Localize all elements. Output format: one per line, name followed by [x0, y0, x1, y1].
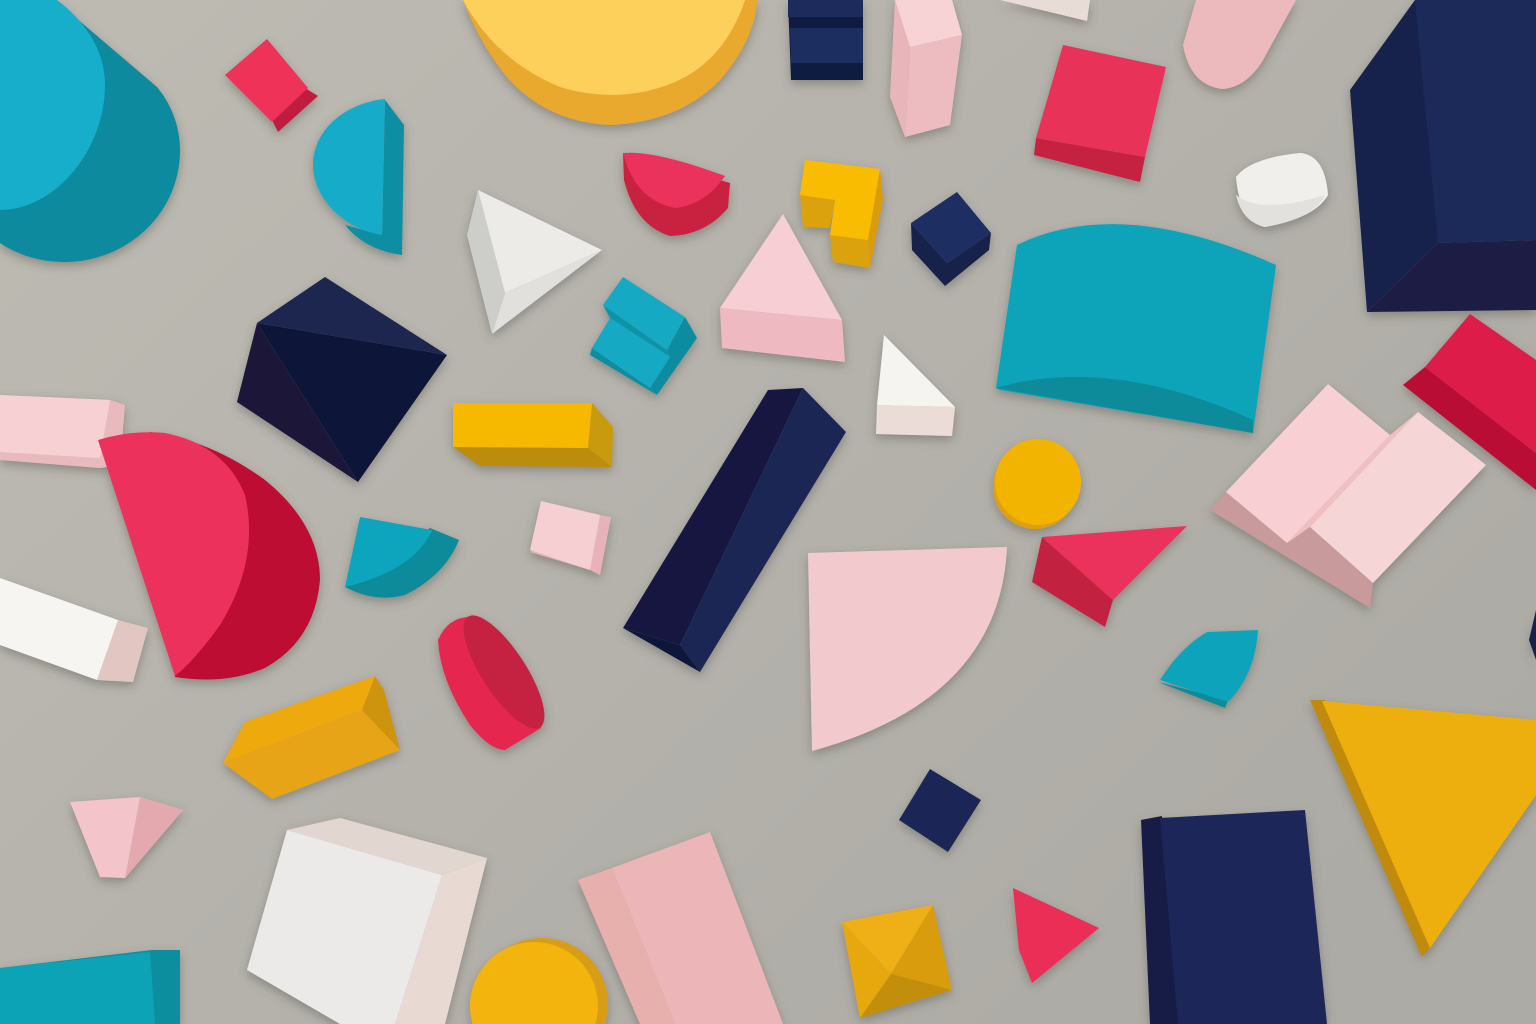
- pink large block: [578, 832, 783, 1024]
- red block right: [1403, 314, 1536, 490]
- pink small cube: [530, 501, 611, 575]
- pink triangle block: [720, 214, 845, 362]
- yellow triangle right: [1310, 700, 1536, 957]
- yellow bar: [453, 403, 613, 467]
- red disc on edge: [438, 605, 558, 750]
- red triangle block: [1032, 526, 1187, 627]
- white pill: [1236, 153, 1328, 227]
- yellow L block: [800, 160, 883, 268]
- navy sliver right edge: [1529, 610, 1536, 660]
- pink cylinder top right: [1183, 0, 1296, 89]
- teal half disc: [313, 99, 404, 255]
- navy large box top right: [1350, 0, 1536, 312]
- yellow prism: [223, 676, 400, 799]
- navy long bar: [623, 388, 846, 672]
- white pyramid: [467, 190, 602, 334]
- teal block bottom left: [0, 950, 180, 1024]
- white sliver top: [1000, 0, 1090, 21]
- red square block: [1034, 45, 1166, 182]
- pink bracket block: [1210, 384, 1486, 608]
- teal small quarter: [1158, 630, 1258, 708]
- pink small pyramid: [70, 797, 183, 878]
- red half cylinder: [98, 432, 320, 680]
- navy small cube: [911, 192, 991, 286]
- pink large quarter: [808, 547, 1007, 751]
- yellow square pyramid: [842, 905, 952, 1018]
- white small triangle: [876, 335, 955, 436]
- teal half cylinder: [996, 224, 1276, 433]
- red small pyramid: [1013, 888, 1099, 983]
- yellow disc: [993, 439, 1081, 529]
- red small block: [225, 39, 318, 132]
- white cube: [247, 818, 487, 1024]
- navy stepped block top: [788, 0, 863, 80]
- yellow disc bottom: [470, 938, 608, 1024]
- teal quarter block: [345, 517, 459, 598]
- white bar left: [0, 578, 148, 682]
- yellow cylinder: [463, 0, 757, 125]
- navy small square: [899, 769, 981, 852]
- teal stepped block: [590, 277, 697, 395]
- navy diamond pyramid: [237, 277, 447, 482]
- pink column: [890, 0, 962, 137]
- red half disc: [623, 153, 730, 236]
- teal cylinder top left: [0, 0, 180, 262]
- navy rectangle block: [1141, 810, 1327, 1024]
- pink bar left: [0, 395, 125, 468]
